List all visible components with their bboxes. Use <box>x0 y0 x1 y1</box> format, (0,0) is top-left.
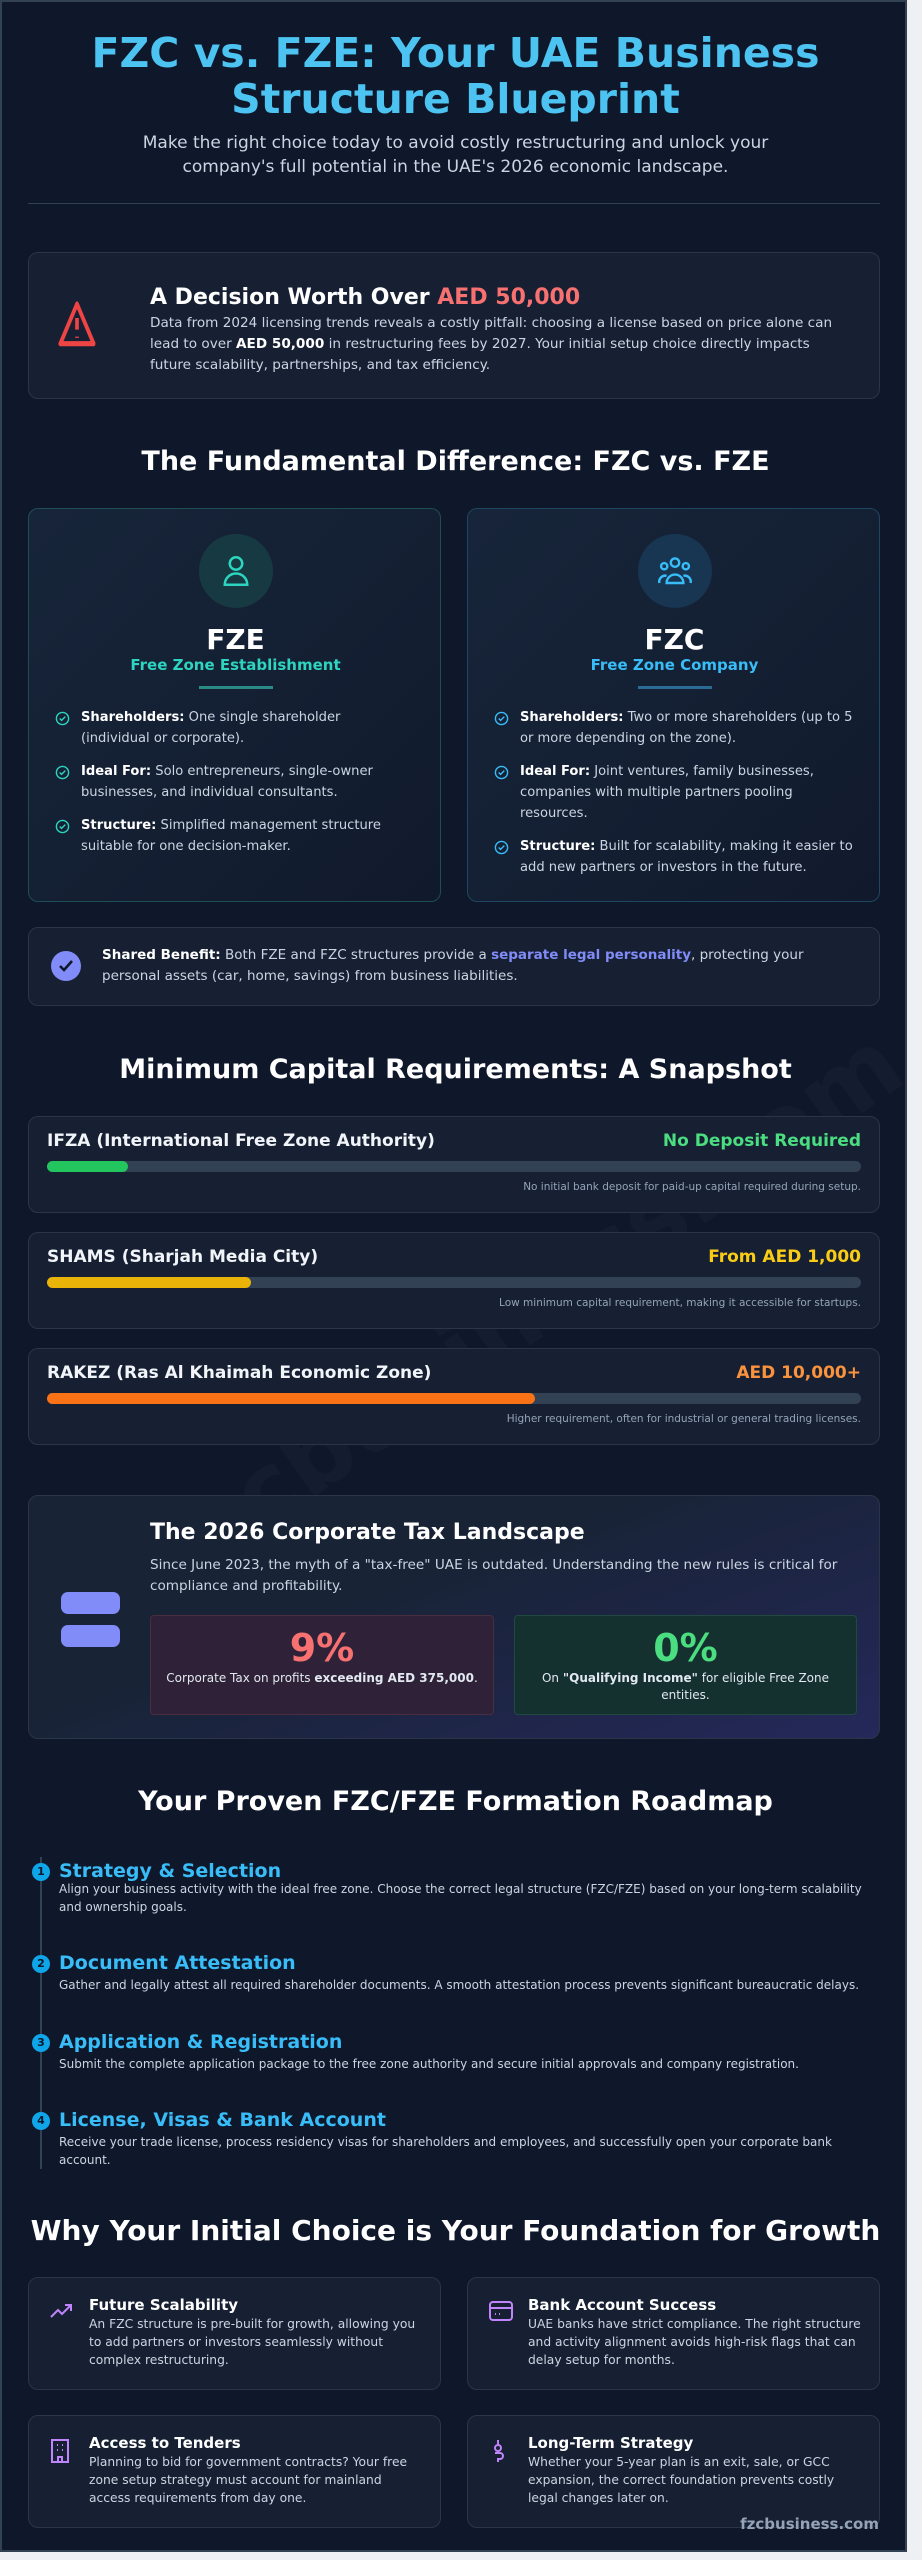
panel: IFZA: No Deposit Required <box>663 1131 861 1151</box>
panel: SHAMS: SHAMS (Sharjah Media City) <box>47 1247 318 1267</box>
bullets: Ideal For: Joint ventures, family businesses, companies with multiple partners pooling resources. <box>520 764 814 821</box>
card: bank account: UAE banks have strict compliance. The right structure and activity alignment avoids high-risk flags that can delay setup for months. <box>528 2317 861 2367</box>
timeline: roadmap: Gather and legally attest all required shareholder documents. A smooth attestation process prevents significant bureaucratic delays. <box>59 1978 859 1992</box>
label: FZE <box>206 623 265 656</box>
heading: fundamental difference: The Fundamental Difference: FZC vs. FZE <box>141 446 770 477</box>
step 3: 3 <box>37 2036 45 2049</box>
panel: corporate tax <box>28 1495 880 1739</box>
icon: warning <box>58 301 96 346</box>
bar <box>47 1393 861 1404</box>
card: bank account: Bank Account Success <box>528 2296 716 2314</box>
card: future scalability <box>28 2277 441 2390</box>
stat: 9%: Corporate Tax on profits exceeding AED 375,000. <box>166 1671 478 1685</box>
panel: FZE <box>28 508 441 902</box>
icon: tax stack <box>61 1592 120 1647</box>
panel: IFZA: IFZA (International Free Zone Authority) <box>47 1131 435 1151</box>
timeline: roadmap: Strategy & Selection <box>59 1860 281 1882</box>
body: Data from 2024 licensing trends reveals a costly pitfall: choosing a license based on price alone can lead to over AED 50,000 in restructuring fees by 2027. Your initial setup choice directly impacts future scalability, partnerships, and tax efficiency. <box>150 315 832 373</box>
timeline: roadmap: Document Attestation <box>59 1952 296 1974</box>
step 3 <box>32 2034 50 2052</box>
card: long-term: Whether your 5-year plan is an exit, sale, or GCC expansion, the correct foundation prevents costly legal changes later on. <box>528 2455 834 2505</box>
heading: minimum capital: Minimum Capital Requirements: A Snapshot <box>119 1054 792 1085</box>
panel: RAKEZ <box>28 1348 880 1445</box>
panel: SHAMS: Low minimum capital requirement, making it accessible for startups. <box>499 1297 861 1309</box>
stat: 0%: 0% <box>653 1626 718 1670</box>
heading: foundation: Why Your Initial Choice is Your Foundation for Growth <box>31 2214 880 2247</box>
panel: decision warning <box>28 252 880 399</box>
title: FZC vs. FZE: Your UAE Business <box>91 29 820 77</box>
bullets: Shareholders: One single shareholder (individual or corporate). <box>81 710 340 746</box>
callout: shared benefit <box>28 927 880 1006</box>
bar <box>47 1161 861 1172</box>
icon: group <box>638 534 712 608</box>
card: long-term <box>467 2415 880 2528</box>
step 4 <box>32 2112 50 2130</box>
body: Since June 2023, the myth of a "tax-free" UAE is outdated. Understanding the new rules is critical for compliance and profitability. <box>150 1557 837 1594</box>
icon: check <box>51 951 81 981</box>
bullets <box>56 710 381 854</box>
step 1 <box>32 1863 50 1881</box>
card: future scalability: An FZC structure is pre-built for growth, allowing you to add partners or investors seamlessly without complex restructuring. <box>89 2317 415 2367</box>
card: tenders: Planning to bid for government contracts? Your free zone setup strategy must account for mainland access requirements from day one. <box>89 2455 407 2505</box>
icon: person <box>199 534 273 608</box>
panel: FZE: Free Zone Establishment <box>130 656 341 674</box>
footer brand: fzcbusiness.com <box>740 2515 879 2533</box>
stat: 9%: 9% <box>290 1626 354 1670</box>
panel: IFZA <box>28 1116 880 1213</box>
timeline: roadmap: Submit the complete application package to the free zone authority and secure initial approvals and company registration. <box>59 2057 799 2071</box>
stat: 9% <box>150 1615 494 1715</box>
panel: IFZA: No initial bank deposit for paid-up capital required during setup. <box>523 1181 861 1193</box>
step 2: 2 <box>37 1957 45 1970</box>
timeline: roadmap: License, Visas & Bank Account <box>59 2109 386 2131</box>
step 1: 1 <box>37 1865 45 1878</box>
bullets: Structure: Simplified management structure suitable for one decision-maker. <box>81 818 381 854</box>
panel: RAKEZ: AED 10,000+ <box>736 1363 861 1383</box>
heading: roadmap: Your Proven FZC/FZE Formation Roadmap <box>138 1786 773 1817</box>
label: FZC <box>644 623 704 656</box>
step 4: 4 <box>37 2114 45 2127</box>
timeline: roadmap <box>32 1857 862 2169</box>
watermark: fzcbusiness.com <box>130 1007 907 1609</box>
heading: The 2026 Corporate Tax Landscape <box>150 1520 585 1545</box>
bar <box>47 1277 861 1288</box>
step 2 <box>32 1955 50 1973</box>
bullets: Ideal For: Solo entrepreneurs, single-owner businesses, and individual consultants. <box>81 764 373 800</box>
panel: SHAMS <box>28 1232 880 1329</box>
panel: FZC: Free Zone Company <box>591 656 758 674</box>
timeline: roadmap: Application & Registration <box>59 2031 342 2053</box>
bullets: Shareholders: Two or more shareholders (up to 5 or more depending on the zone). <box>520 710 852 746</box>
title <box>91 29 820 123</box>
stat: 0% <box>514 1615 857 1715</box>
card: bank account <box>467 2277 880 2390</box>
timeline: roadmap: Receive your trade license, process residency visas for shareholders and employees, and successfully open your corporate bank account. <box>59 2135 832 2167</box>
card: future scalability: Future Scalability <box>89 2296 238 2314</box>
panel: RAKEZ: Higher requirement, often for industrial or general trading licenses. <box>507 1413 861 1425</box>
panel: RAKEZ: RAKEZ (Ras Al Khaimah Economic Zone) <box>47 1363 431 1383</box>
card: tenders: Access to Tenders <box>89 2434 241 2452</box>
bullets: Structure: Built for scalability, making it easier to add new partners or investors in the future. <box>520 839 853 875</box>
subtitle: Make the right choice today to avoid costly restructuring and unlock your company's full potential in the UAE's 2026 economic landscape. <box>143 133 768 177</box>
title: Structure Blueprint <box>231 75 680 123</box>
text: Shared Benefit: Both FZE and FZC structures provide a separate legal personality, protecting your personal assets (car, home, savings) from business liabilities. <box>102 947 804 984</box>
panel: SHAMS: From AED 1,000 <box>708 1247 861 1267</box>
card: tenders <box>28 2415 441 2528</box>
timeline: roadmap: Align your business activity with the ideal free zone. Choose the correct legal structure (FZC/FZE) based on your long-term scalability and ownership goals. <box>59 1882 862 1914</box>
bullets <box>494 710 853 875</box>
stat: 0%: On "Qualifying Income" for eligible Free Zone entities. <box>542 1671 829 1702</box>
panel: FZC <box>467 508 880 902</box>
heading: A Decision Worth Over AED 50,000 <box>150 285 580 310</box>
card: long-term: Long-Term Strategy <box>528 2434 693 2452</box>
